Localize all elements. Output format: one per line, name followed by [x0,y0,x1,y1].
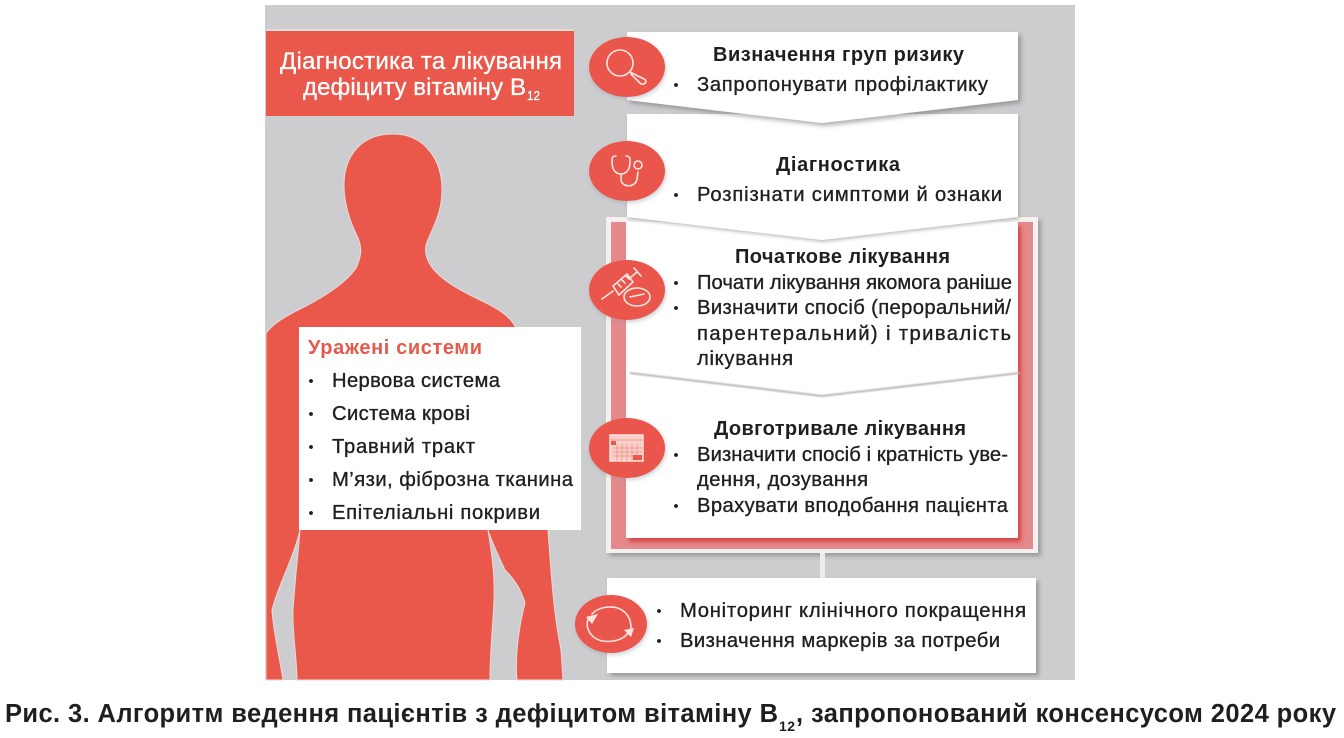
panel: diagnosis [627,114,1018,240]
list: initial treatment: Визначити спосіб (пероральний/ [697,297,1011,319]
human silhouette [266,134,563,680]
background panel [265,5,1075,680]
list: affected systems: Нервова система [332,370,501,392]
list: initial treatment: Почати лікування якомога раніше [697,272,1012,294]
icon: refresh cycle [575,595,647,653]
panel: risk groups [627,32,1018,123]
caption: Рис. 3. Алгоритм ведення пацієнтів з дефіцитом вітаміну B [5,700,778,728]
list: initial treatment: лікування [697,348,793,370]
panel: treatment frame [606,217,1038,553]
caption [5,700,1337,734]
caption: , запропонований консенсусом 2024 року [796,700,1337,728]
title block: дефіциту вітаміну B [303,74,526,101]
text: diagnosis item: Розпізнати симптоми й ознаки [697,184,1002,206]
title block: 12 [527,88,540,103]
icon: syringe and pill [589,260,665,320]
list: monitoring: Моніторинг клінічного покращення [680,600,1026,622]
icon: stethoscope [589,141,665,201]
list: affected systems: Епітеліальні покриви [332,502,540,524]
list: initial treatment: парентеральний) і тривалість [697,323,1011,345]
list: long-term treatment: Визначити спосіб і кратність уве- [697,444,1008,466]
caption: 12 [779,718,795,734]
list: initial treatment [674,272,1012,370]
heading: diagnosis: Діагностика [776,154,901,176]
panel: initial treatment [630,246,1020,396]
heading: risk groups: Визначення груп ризику [713,44,965,66]
icon: calendar [589,418,665,478]
list: affected systems: М’язи, фіброзна тканина [332,469,574,491]
list: long-term treatment: дення, дозування [697,469,868,491]
heading: long-term treatment: Довготривале лікування [714,418,966,440]
title block: Діагностика та лікування [280,48,562,75]
list: affected systems: Травний тракт [332,436,475,458]
list: monitoring: Визначення маркерів за потреби [680,630,1000,652]
panel: monitoring [607,578,1036,673]
heading: affected systems: Уражені системи [308,337,482,359]
list: affected systems [309,370,574,524]
panel: long-term treatment [674,418,1009,517]
text: risk group item: Запропонувати профілактику [697,74,989,96]
panel: affected systems [299,327,581,530]
heading: initial treatment: Початкове лікування [735,246,950,268]
list: affected systems: Система крові [332,403,470,425]
list: long-term treatment [674,444,1009,517]
connector [820,553,825,578]
title block [266,29,574,116]
icon: magnifier [589,37,665,97]
list: monitoring [657,600,1026,652]
list: long-term treatment: Врахувати вподобання пацієнта [697,495,1009,517]
